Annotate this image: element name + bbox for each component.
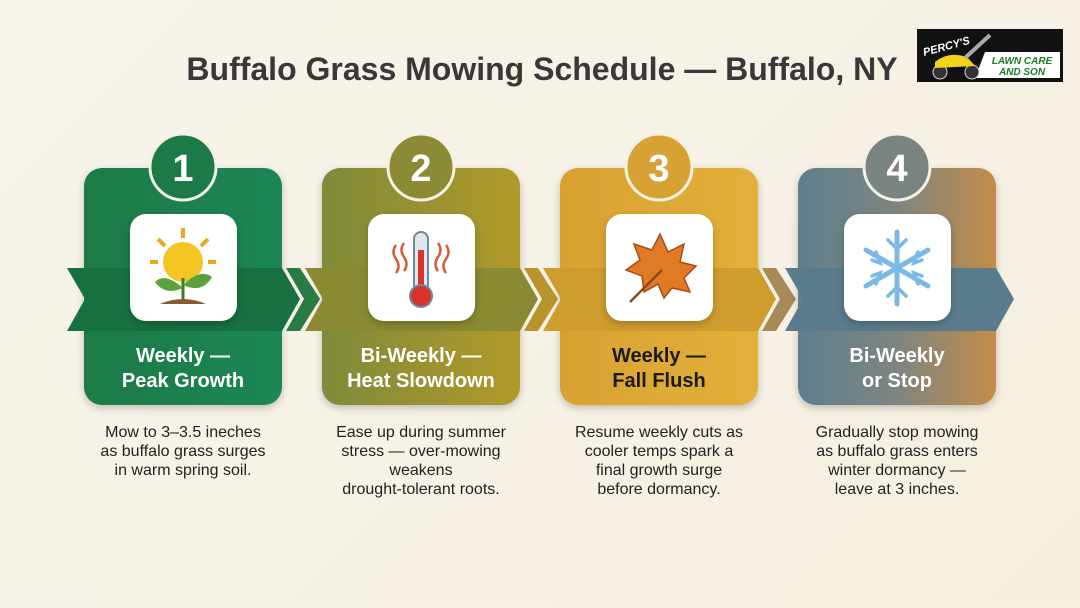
text: step 3 description [575, 424, 743, 498]
panel: step 1 [67, 134, 320, 405]
text: step 3 description: before dormancy. [597, 481, 721, 498]
panel: step 1: 1 [172, 148, 194, 190]
logo: AND SON [998, 67, 1046, 78]
panel: step 3: Fall Flush [612, 370, 706, 392]
text: step 1 description [100, 424, 266, 479]
logo: PERCY'S [922, 35, 972, 59]
logo [917, 29, 1063, 82]
icon: maple leaf [626, 234, 696, 302]
logo: LAWN CARE [992, 56, 1053, 67]
text: step 2 description: weakens [388, 462, 453, 479]
panel: step 3 [543, 134, 796, 405]
title: Buffalo Grass Mowing Schedule — Buffalo, NY [186, 51, 898, 87]
icon: sun sprout [150, 228, 216, 304]
text: step 4 description: winter dormancy — [827, 462, 966, 479]
panel: step 3: Weekly — [612, 345, 706, 367]
text: step 2 description: Ease up during summer [336, 424, 507, 441]
text: step 4 description [816, 424, 978, 498]
text: step 4 description: as buffalo grass enters [816, 443, 978, 460]
panel: step 2: Bi-Weekly — [361, 345, 481, 367]
panel: step 4: Bi-Weekly [849, 345, 945, 367]
panel: step 4: 4 [886, 148, 908, 190]
panel: step 1: Weekly — [136, 345, 230, 367]
text: step 3 description: final growth surge [596, 462, 722, 479]
panel: step 1: Peak Growth [122, 370, 244, 392]
text: step 1 description: as buffalo grass surges [100, 443, 266, 460]
text: step 3 description: cooler temps spark a [585, 443, 733, 460]
text: step 3 description: Resume weekly cuts as [575, 424, 743, 441]
panel: step 2: 2 [410, 148, 432, 190]
icon: snowflake [866, 232, 928, 304]
text: step 1 description: in warm spring soil. [115, 462, 251, 479]
panel: step 3: 3 [648, 148, 670, 190]
panel: step 4: or Stop [862, 370, 932, 392]
text: step 4 description: leave at 3 inches. [835, 481, 959, 498]
icon: thermometer [394, 232, 448, 307]
panel: step 4 [785, 134, 1014, 405]
text: step 2 description [336, 424, 507, 498]
text: step 2 description: stress — over-mowing [341, 443, 501, 460]
text: step 4 description: Gradually stop mowing [816, 424, 978, 441]
text: step 2 description: drought-tolerant roots. [342, 481, 500, 498]
panel: step 2: Heat Slowdown [347, 370, 495, 392]
text: step 1 description: Mow to 3–3.5 ineches [105, 424, 261, 441]
panel: step 2 [305, 134, 558, 405]
